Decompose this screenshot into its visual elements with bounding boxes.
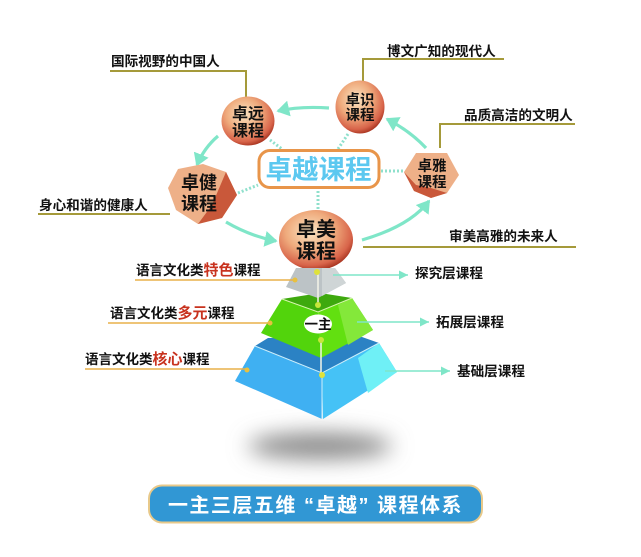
pyramid: top layer — [286, 268, 346, 298]
label: 语言文化类核心课程: 语言文化类核心课程 — [85, 350, 210, 368]
label: 语言文化类特色课程 — [135, 261, 298, 282]
node: 卓美课程 — [279, 210, 353, 270]
cycle arrows — [197, 107, 429, 241]
node: 卓远课程 — [222, 96, 274, 146]
node: 卓健课程: 卓健 — [181, 173, 217, 193]
label: 语言文化类多元课程 — [108, 304, 272, 326]
label: 博文广知的现代人: 博文广知的现代人 — [387, 43, 496, 59]
label: 国际视野的中国人 — [110, 53, 246, 97]
node: 卓雅课程 — [404, 153, 459, 198]
node: 卓美课程: 课程 — [296, 240, 336, 263]
label: 品质高洁的文明人 — [440, 107, 575, 148]
label: 语言文化类核心课程 — [85, 350, 250, 372]
center box: 卓越课程: 卓越课程 — [266, 155, 372, 185]
node: 卓远课程: 卓远 — [232, 105, 264, 123]
node: 卓远课程: 课程 — [232, 122, 264, 140]
node: 卓健课程: 课程 — [181, 194, 217, 214]
label: 身心和谐的健康人: 身心和谐的健康人 — [39, 197, 148, 213]
label: 审美高雅的未来人: 审美高雅的未来人 — [449, 228, 558, 244]
title banner: 一主三层五维 “卓越” 课程体系 — [168, 494, 463, 517]
label: 博文广知的现代人 — [363, 43, 504, 83]
pyramid: base layer — [235, 337, 397, 419]
node: 卓雅课程: 课程 — [418, 174, 447, 191]
label: 语言文化类多元课程: 语言文化类多元课程 — [110, 304, 235, 322]
node: 卓识课程: 卓识 — [346, 91, 374, 109]
pyramid shadow — [248, 433, 392, 459]
label with arrow: 拓展层课程: 拓展层课程 — [436, 314, 504, 330]
node: 卓识课程: 课程 — [346, 107, 375, 124]
label with arrow: 基础层课程: 基础层课程 — [457, 363, 525, 379]
node: 卓健课程 — [168, 164, 237, 224]
pyramid axis — [314, 269, 325, 378]
label with arrow: 探究层课程: 探究层课程 — [415, 265, 483, 281]
node: 卓识课程 — [336, 80, 384, 134]
title banner — [149, 486, 482, 522]
pyramid: middle layer — [261, 293, 373, 358]
dotted connectors — [238, 134, 405, 211]
label: 语言文化类特色课程: 语言文化类特色课程 — [136, 261, 261, 279]
label: 品质高洁的文明人: 品质高洁的文明人 — [464, 107, 573, 123]
label: 国际视野的中国人: 国际视野的中国人 — [111, 53, 220, 69]
node: 卓雅课程: 卓雅 — [418, 157, 446, 175]
node: 卓美课程: 卓美 — [296, 218, 336, 241]
badge: 一主: 一主 — [304, 316, 332, 332]
